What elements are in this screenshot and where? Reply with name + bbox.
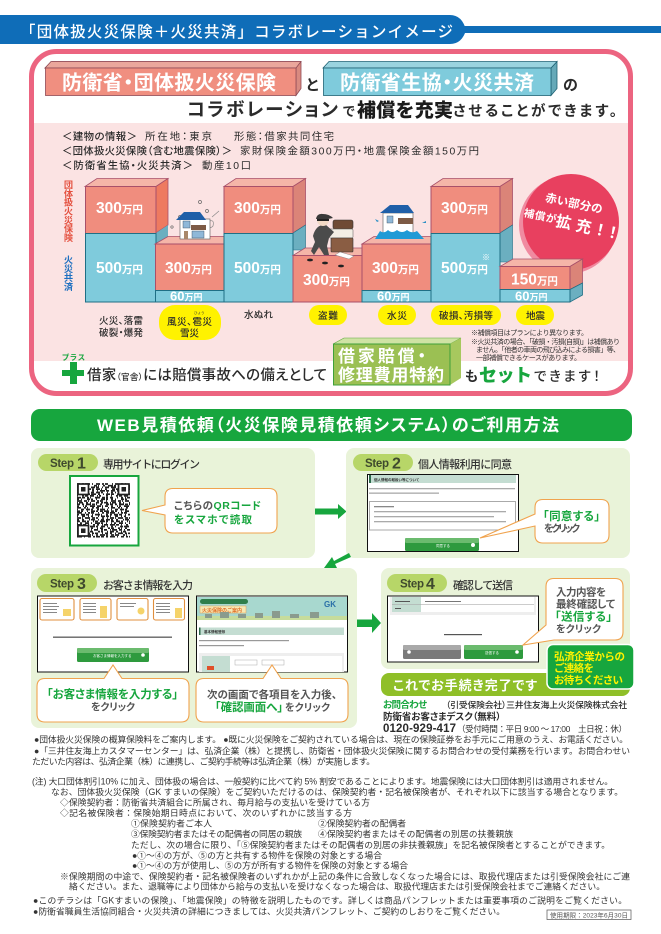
box: 弘済企業からのご連絡をお待ちください bbox=[547, 644, 634, 689]
step 3 badge: 3 bbox=[77, 576, 86, 593]
heading line 2 bbox=[187, 99, 617, 122]
vertical legend: 団体扱火災保険: 団体扱火災保険 bbox=[62, 180, 73, 243]
screenshot: consent page bbox=[368, 474, 518, 552]
building info text: ＜団体扱火災保険（含む地震保険）＞ bbox=[62, 144, 232, 158]
arrow: step 1 to step 2 bbox=[315, 504, 346, 519]
bar: wind: 300万円 bbox=[165, 260, 212, 277]
label pill: 風災、雹災 雪災: 風災、雹災 bbox=[167, 317, 212, 328]
bar chart: coverage by damage type bbox=[85, 178, 582, 304]
notes text block: ●このチラシは「GKすまいの保険」、「地震保険」の特徴を説明したものです。詳しくは商品パンフレットまたは重要事項のご説明をご覧ください。 bbox=[33, 894, 627, 906]
banner: これでお手続き完了です bbox=[381, 673, 630, 696]
callout: 送信する: 最終確認して bbox=[556, 598, 615, 610]
notes text block: 絡ください。また、退職等により団体から給与の支払いを受けなくなった場合は、取扱代理店または引受保険会社までご連絡ください。 bbox=[69, 880, 605, 892]
building info text: 動産10口 bbox=[202, 159, 251, 172]
notes text block: ただいた内容は、弘済企業（株）に連携し、ご契約手続等は弘済企業（株）が実施します。 bbox=[32, 756, 375, 766]
notes text block: ●「三井住友海上カスタマーセンター」は、弘済企業（株）と提携し、防衛省・団体扱火災保険に関するお問合わせの受付業務を行います。お問合わせい bbox=[34, 745, 630, 756]
step 2 badge: 2 bbox=[392, 456, 401, 472]
arrow: step 2 to step 3 bbox=[324, 553, 351, 568]
label: 水ぬれ: 水ぬれ bbox=[244, 309, 273, 321]
panel: step 1 bbox=[31, 448, 315, 558]
contact block: 防衛省お客さまデスク（無料） bbox=[383, 711, 501, 723]
box: 弘済企業からのご連絡をお待ちください: ご連絡を bbox=[554, 662, 594, 674]
callout: 確認画面へ bbox=[196, 665, 348, 722]
title banner bbox=[0, 15, 661, 44]
notes text block: ●①～④の方が、⑤の方と共有する物件を保険の対象とする場合 bbox=[132, 850, 382, 860]
step 1 title: 専用サイトにログイン bbox=[103, 457, 200, 471]
bar: theft: 300万円 bbox=[303, 272, 350, 289]
step 3 badge: Step bbox=[50, 578, 74, 590]
label pill: 水災: 水災 bbox=[387, 310, 407, 322]
label pill: 水災 bbox=[378, 305, 416, 325]
step 4 title: 確認して送信 bbox=[453, 578, 513, 592]
heading line 2: 補償を充実 bbox=[357, 100, 453, 122]
bar: fire bbox=[85, 178, 168, 302]
label pill: 破損、汚損等 bbox=[431, 305, 501, 325]
notes text block: ①保険契約者ご本人 bbox=[131, 818, 212, 828]
step 2 badge: Step bbox=[365, 458, 389, 470]
step 1 badge: Step bbox=[50, 458, 74, 470]
bar: damage: 500万円 bbox=[441, 260, 488, 277]
callout circle: 赤い部分の補償が拡充: 拡充！！ bbox=[554, 212, 618, 243]
callout: 同意する: 「同意する」 bbox=[543, 510, 600, 523]
bar: water leak bbox=[224, 178, 306, 302]
text: もセットできます bbox=[465, 366, 600, 386]
text: の: の bbox=[563, 77, 578, 94]
callout circle: 赤い部分の補償が拡充 bbox=[519, 174, 622, 274]
screenshot: input page bbox=[196, 596, 348, 672]
heading line 2: で bbox=[342, 104, 355, 119]
label pill: 盗難 bbox=[309, 305, 347, 325]
bar: fire: 300万円 bbox=[96, 200, 143, 217]
callout: お客さま情報を入力する: をクリック bbox=[91, 702, 135, 714]
callout: 送信する bbox=[523, 578, 623, 645]
panel: collaboration image bbox=[32, 52, 630, 394]
vertical legend: 火災共済: 火災共済 bbox=[62, 255, 73, 292]
callout: QR code: をスマホで読取 bbox=[174, 513, 252, 526]
plus label: プラス bbox=[62, 353, 85, 362]
notes text block: ただし、次の場合に限り、「⑤保険契約者またはその配偶者の別居の非扶養親族」を記名被保険者とすることができます。 bbox=[131, 839, 610, 850]
contact block: 0120-929-417 bbox=[383, 723, 456, 735]
screenshot: consent page: 同意する bbox=[436, 543, 450, 548]
footnotes: ※火災共済の場合、「破損・汚損(自損)」は補償あり bbox=[471, 337, 620, 346]
screenshot: input page: 基本情報登録 bbox=[204, 629, 225, 634]
label pill: 地震: 地震 bbox=[526, 310, 545, 322]
icon: plus bbox=[62, 362, 84, 384]
footnotes bbox=[471, 328, 620, 362]
footnotes: ません。「他者の車両の飛び込みによる損害」等、 bbox=[476, 345, 620, 354]
heading box: 防衛省・団体扱火災保険: 防衛省・団体扱火災保険 bbox=[62, 72, 276, 94]
icon: burglar with boxes bbox=[311, 214, 354, 259]
label pill: 風災、雹災 雪災: 雪災 bbox=[180, 328, 199, 340]
step 1 badge bbox=[38, 454, 98, 472]
box: 借家賠償・修理費用特約: 借家賠償・ bbox=[338, 346, 426, 366]
label pill: 風災、雹災 雪災: ひょう bbox=[194, 310, 204, 315]
callout: 送信する: 「送信する」 bbox=[555, 610, 612, 624]
contact block: （受付時間：平日 9:00 ～ 17:00 土日祝：休） bbox=[457, 724, 627, 734]
callout: 確認画面へ: 「確認画面へ」 bbox=[215, 700, 283, 714]
contact block: （引受保険会社）三井住友海上火災保険株式会社 bbox=[446, 699, 627, 710]
banner: これでお手続き完了です: これでお手続き完了です bbox=[393, 678, 538, 693]
step 2 badge bbox=[353, 454, 413, 472]
step 4 badge: 4 bbox=[426, 576, 435, 593]
callout: QR code bbox=[142, 488, 277, 533]
notes text block: ●団体扱火災保険の概算保険料をご案内します。 ●既に火災保険をご契約されている場合は、現在の保険証券をお手元にご用意のうえ、お電話ください。 bbox=[34, 734, 628, 744]
screenshot: input page: GK bbox=[324, 600, 336, 609]
callout: QR code: こちらのQRコード bbox=[174, 500, 261, 512]
notes text block: ※保険期間の中途で、保険契約者・記名被保険者のいずれかが上記の条件に合致しなくなった場合には、取扱代理店または引受保険会社にご連 bbox=[60, 870, 630, 882]
notes text block bbox=[32, 734, 630, 916]
footnotes: 一部補償できるケースがあります。 bbox=[476, 353, 581, 362]
bar: damage: 300万円 bbox=[441, 200, 488, 217]
building info text: 所在地：東京 bbox=[145, 130, 212, 143]
screenshot: confirm page bbox=[388, 596, 538, 662]
bar: wind: 60万円 bbox=[170, 288, 202, 304]
text: 借家には賠償事故への備えとして: 借家（官舎）には賠償事故への備えとして bbox=[87, 367, 327, 384]
heading box: 防衛省生協・火災共済: 防衛省生協・火災共済 bbox=[340, 72, 534, 94]
bar: fire: 500万円 bbox=[96, 260, 143, 277]
step 3 badge bbox=[37, 574, 97, 593]
notes text block: なお、団体扱火災保険（GK すまいの保険）をご契約いただけるのは、保険契約者・記名被保険者が、それぞれ以下に該当する場合となります。 bbox=[51, 786, 623, 797]
callout: 送信する: をクリック bbox=[556, 624, 601, 636]
heading line 2: させることができます。 bbox=[453, 102, 617, 120]
screenshot: input page: 火災保険のご案内 bbox=[202, 607, 242, 614]
building info text: 家財保険金額300万円・地震保険金額150万円 bbox=[240, 144, 479, 158]
expiry date box: 使用期限：2023年6月30日 bbox=[550, 910, 628, 920]
callout: 同意する: をクリック bbox=[544, 523, 580, 535]
heading box: 防衛省生協・火災共済 bbox=[323, 62, 557, 96]
step 4 badge: Step bbox=[400, 578, 424, 590]
bar: flood: 60万円 bbox=[377, 288, 409, 304]
panel: step 2 bbox=[346, 448, 630, 558]
contact block: お問合わせ bbox=[383, 699, 427, 711]
bar: earthquake: 60万円 bbox=[515, 288, 547, 304]
notes text block: (注) 大口団体割引10% に加え、団体扱の場合は、一般契約に比べて約 5% 割安であることによります。地震保険には大口団体割引は適用されません。 bbox=[32, 776, 613, 786]
label: 火災、落雷 破裂・爆発: 火災、落雷 bbox=[99, 315, 143, 327]
step 1 badge: 1 bbox=[77, 456, 86, 472]
expiry date box bbox=[547, 910, 631, 920]
heading: WEB見積依頼 bbox=[31, 409, 632, 441]
notes text block: ●防衛省職員生活協同組合・火災共済の詳細につきましては、火災共済パンフレット、ご契約のしおりをご覧ください。 bbox=[33, 906, 505, 916]
building info text: 形態：借家共同住宅 bbox=[234, 130, 334, 143]
bar: damage bbox=[431, 178, 512, 302]
building info text bbox=[62, 130, 479, 172]
bar: water leak: 500万円 bbox=[234, 260, 281, 277]
box: 弘済企業からのご連絡をお待ちください: お待ちください bbox=[554, 674, 623, 686]
bar: flood bbox=[362, 236, 431, 304]
bar: earthquake bbox=[500, 259, 582, 304]
text: もセットできます: セット bbox=[479, 366, 532, 386]
bar: theft bbox=[293, 248, 362, 302]
icon: house in storm bbox=[171, 200, 219, 239]
callout: 送信する: 入力内容を bbox=[556, 586, 606, 598]
callout: 確認画面へ: をクリック bbox=[285, 702, 330, 714]
box: 借家賠償・修理費用特約 bbox=[333, 338, 461, 385]
notes text block: ②保険契約者の配偶者 bbox=[318, 818, 406, 828]
notes text block: ◇保険契約者：防衛省共済組合に所属され、毎月給与の支払いを受けている方 bbox=[60, 796, 370, 808]
notes text block: ●①～④の方が使用し、⑤の方が所有する物件を保険の対象とする場合 bbox=[132, 860, 408, 870]
text: もセットできます: できます！ bbox=[534, 369, 600, 384]
screenshot: customer info page bbox=[38, 596, 188, 672]
callout circle: 赤い部分の補償が拡充: 補償が bbox=[523, 206, 558, 226]
bar: earthquake: 150万円 bbox=[511, 272, 558, 288]
callout: 確認画面へ: 次の画面で各項目を入力後、 bbox=[207, 688, 337, 701]
callout: お客さま情報を入力する: 「お客さま情報を入力する」 bbox=[47, 687, 178, 701]
label pill: 盗難: 盗難 bbox=[318, 310, 338, 322]
box: 弘済企業からのご連絡をお待ちください: 弘済企業からの bbox=[554, 650, 625, 663]
screenshot: customer info page: お客さま情報を入力する bbox=[93, 653, 132, 658]
panel: step 3 bbox=[31, 568, 357, 728]
label: 火災、落雷 破裂・爆発 bbox=[99, 315, 143, 339]
arrow: step 3 to step 4 bbox=[357, 613, 381, 633]
building info text: ＜建物の情報＞ bbox=[62, 130, 137, 143]
contact block bbox=[383, 699, 627, 735]
bar: flood: 300万円 bbox=[372, 260, 419, 277]
callout: お客さま情報を入力する bbox=[37, 665, 189, 722]
title banner: 「団体扱火災保険＋火災共済」コラボレーションイメージ bbox=[20, 23, 453, 41]
step 2 title: 個人情報利用に同意 bbox=[418, 457, 512, 471]
callout circle: 赤い部分の補償が拡充: 赤い部分の bbox=[544, 191, 604, 216]
notes text block: ④保険契約者またはその配偶者の別居の扶養親族 bbox=[318, 828, 513, 839]
icon: flooded house bbox=[375, 205, 426, 239]
label: 火災、落雷 破裂・爆発: 破裂・爆発 bbox=[99, 327, 143, 339]
box: 借家賠償・修理費用特約: 修理費用特約 bbox=[338, 366, 444, 385]
screenshot: consent page: 個人情報の取扱い等について bbox=[374, 477, 420, 482]
notes text block: ③保険契約者またはその配偶者の同居の親族 bbox=[131, 828, 302, 839]
step 4 badge bbox=[387, 574, 447, 593]
screenshot: confirm page: 送信する bbox=[485, 650, 499, 655]
heading box: 防衛省・団体扱火災保険 bbox=[45, 62, 301, 96]
text: もセットできます: も bbox=[465, 369, 478, 384]
bar: wind bbox=[155, 236, 224, 304]
QR code bbox=[70, 476, 138, 546]
panel: step 4 bbox=[381, 568, 630, 669]
bar: damage: ※ bbox=[482, 253, 490, 262]
heading: WEB見積依頼: WEB見積依頼（火災保険見積依頼システム）のご利用方法 bbox=[97, 415, 559, 435]
label pill: 風災、雹災 雪災 bbox=[159, 305, 221, 340]
footnotes: ※補償項目はプランにより異なります。 bbox=[471, 328, 588, 337]
label pill: 破損、汚損等: 破損、汚損等 bbox=[439, 310, 493, 322]
bar: water leak: 300万円 bbox=[234, 200, 281, 217]
building info text: ＜防衛省生協・火災共済＞ bbox=[62, 159, 193, 172]
text: と: と bbox=[306, 77, 319, 94]
step 3 title: お客さま情報を入力 bbox=[103, 578, 193, 592]
heading line 2: コラボレーション bbox=[187, 99, 338, 120]
callout: 同意する bbox=[480, 500, 609, 543]
label pill: 地震 bbox=[516, 305, 554, 325]
notes text block: ◇記名被保険者：保険始期日時点において、次のいずれかに該当する方 bbox=[60, 807, 352, 818]
